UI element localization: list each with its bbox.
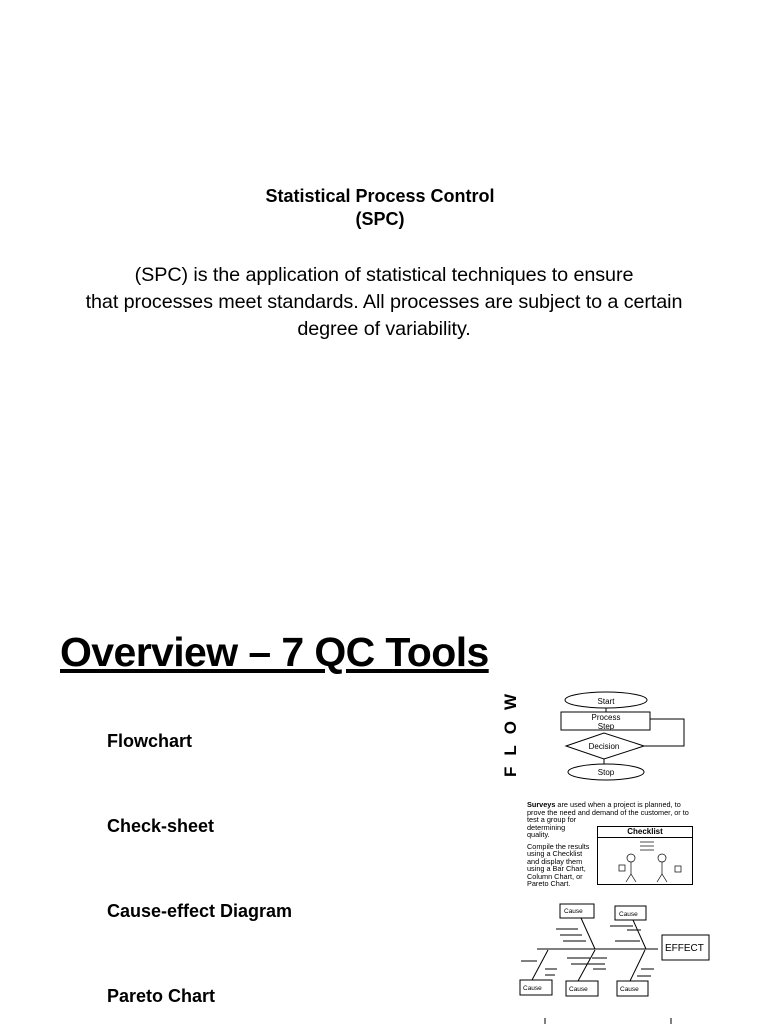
fishbone diagram: Cause [619,911,638,918]
fishbone diagram: Cause [620,986,639,993]
fishbone diagram [520,904,710,1024]
flow diagram: Process [592,713,620,722]
flow diagram: Decision [589,742,619,751]
item: pareto: Pareto Chart [107,986,215,1006]
fishbone diagram: EFFECT [665,943,704,954]
flow diagram: Stop [598,768,615,777]
check-sheet image: quality. [527,830,550,839]
fishbone diagram: Cause [564,908,583,915]
check-sheet image [527,800,693,888]
flow diagram: FLOW [501,683,520,777]
check-sheet image: determining [527,822,565,832]
fishbone diagram: Cause [569,986,588,993]
intro text: (SPC) is the application of statistical techniques to ensure [135,264,633,286]
flow diagram: Step [598,722,615,731]
item: check-sheet: Check-sheet [107,816,214,836]
item: cause-effect: Cause-effect Diagram [107,901,292,921]
intro text: that processes meet standards. All processes are subject to a certain [86,291,682,313]
check-sheet image: Surveys are used when a project is planned, to prove the need and demand of the customer, or to test a group for [527,800,689,824]
checklist box [597,826,693,885]
fishbone diagram: Cause [523,985,542,992]
title: Statistical Process Control [265,186,495,206]
intro text: degree of variability. [297,318,471,340]
item: flowchart: Flowchart [107,731,192,751]
flow diagram: Start [598,697,615,706]
title [265,186,495,229]
check-sheet image: Compile the results using a Checklist and display them using a Bar Chart, Column Chart, or Pareto Chart. [527,842,589,888]
heading: Overview – 7 QC Tools [60,629,489,675]
checklist box: Checklist [627,827,663,836]
title: (SPC) [356,209,404,229]
flow diagram [501,683,684,780]
intro text [86,264,682,340]
